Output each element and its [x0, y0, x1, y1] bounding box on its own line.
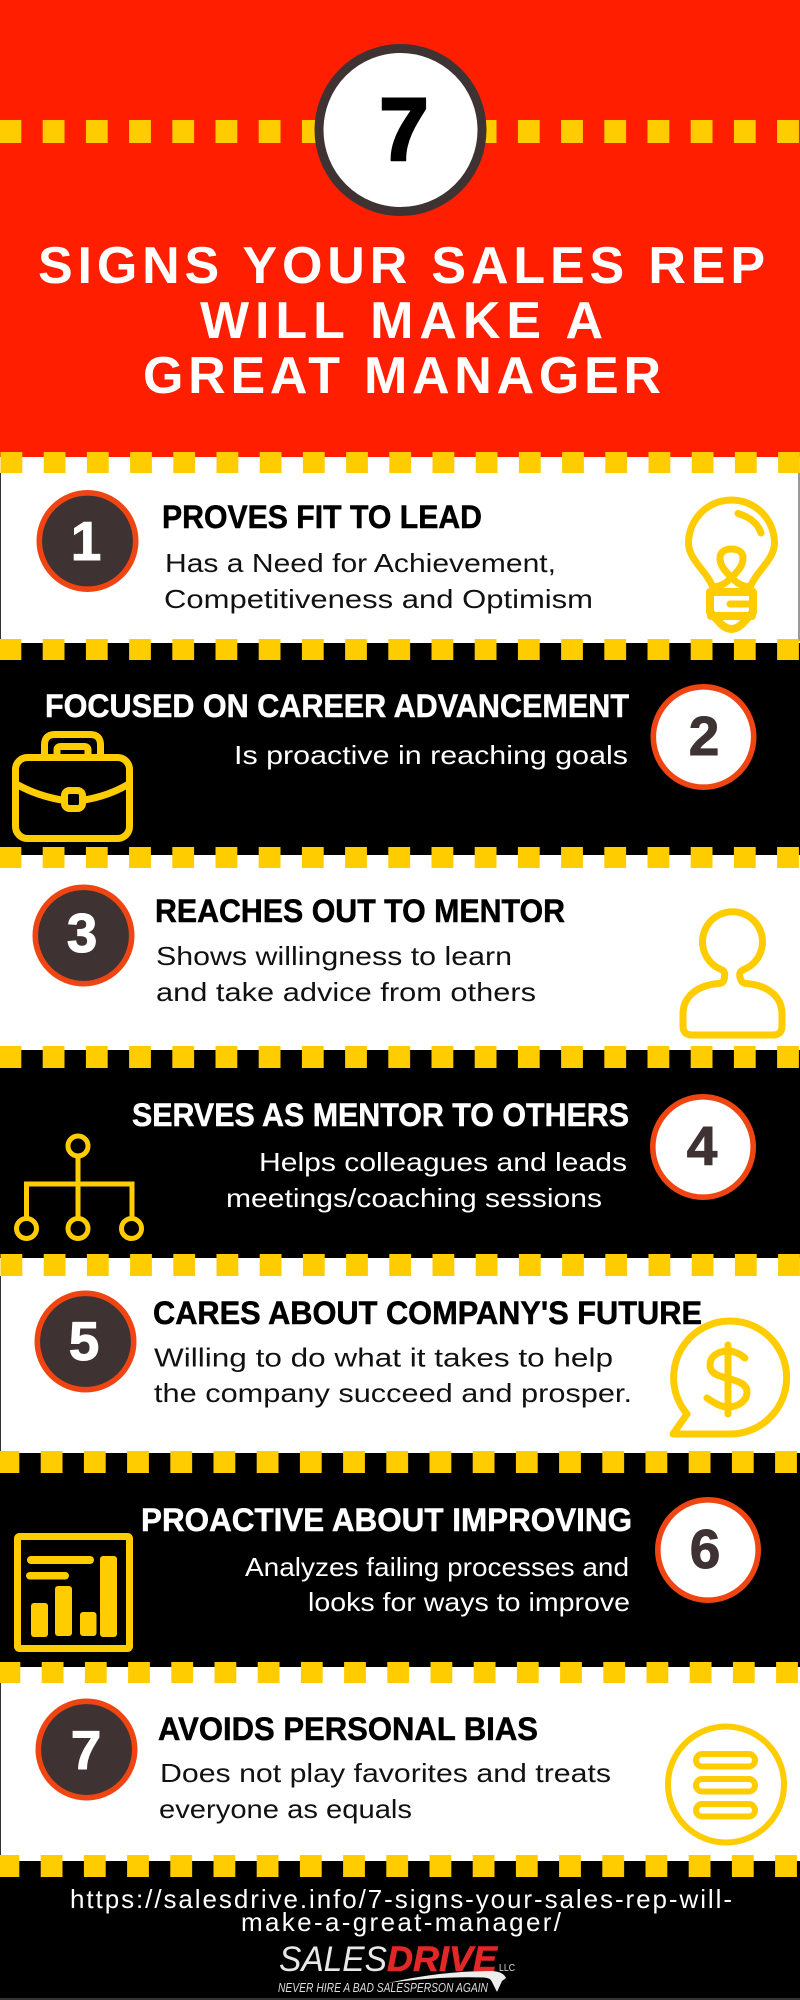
article url: [70, 1884, 732, 1937]
number badge 6: 6: [690, 1518, 720, 1580]
heading 2: FOCUSED ON CAREER ADVANCEMENT: [45, 688, 629, 724]
body text 7: everyone as equals: [159, 1794, 412, 1824]
body text 1: Competitiveness and Optimism: [164, 584, 593, 614]
number badge 4: [653, 1097, 753, 1197]
panel: sign 2: [0, 643, 800, 855]
icon: org chart: [16, 1136, 142, 1238]
title: [38, 237, 765, 405]
number badge 6: [658, 1500, 758, 1600]
body text 2: Is proactive in reaching goals: [234, 740, 628, 770]
number badge 1: [39, 493, 136, 589]
panel: sign 7: [0, 1667, 800, 1861]
body text 3: [156, 941, 536, 1007]
icon: bar chart report: [18, 1536, 130, 1648]
body text 1: Has a Need for Achievement,: [165, 548, 556, 578]
number badge 5: 5: [69, 1310, 99, 1372]
heading 7: AVOIDS PERSONAL BIAS: [158, 1711, 538, 1747]
title: WILL MAKE A: [200, 292, 603, 350]
body text 6: Analyzes failing processes and: [245, 1552, 629, 1582]
body text 4: Helps colleagues and leads: [259, 1147, 627, 1177]
panel: sign 1: [0, 457, 800, 643]
number badge 2: [653, 687, 754, 787]
number badge 3: 3: [67, 902, 97, 964]
body text 5: [154, 1342, 632, 1408]
body text 3: Shows willingness to learn: [156, 941, 512, 971]
article url: https://salesdrive.info/7-signs-your-sales-rep-will-: [70, 1884, 732, 1914]
number badge 7: [38, 1701, 135, 1798]
body text 6: looks for ways to improve: [308, 1587, 630, 1617]
body text 4: [226, 1147, 627, 1213]
number badge 3: [35, 887, 132, 984]
panel: sign 5: [0, 1258, 800, 1453]
heading 6: PROACTIVE ABOUT IMPROVING: [141, 1502, 632, 1538]
icon: list in circle: [668, 1726, 784, 1842]
number badge 7: 7: [71, 1719, 101, 1781]
body text 6: [245, 1552, 630, 1617]
heading 4: SERVES AS MENTOR TO OTHERS: [132, 1097, 629, 1133]
body text 3: and take advice from others: [156, 977, 536, 1007]
number badge 1: 1: [71, 510, 101, 572]
body text 4: meetings/coaching sessions: [226, 1183, 602, 1213]
body text 7: [159, 1758, 611, 1824]
icon: number seven badge: 7: [380, 80, 428, 179]
title: GREAT MANAGER: [143, 347, 661, 405]
number badge 4: 4: [687, 1114, 718, 1176]
panel: sign 4: [0, 1050, 800, 1258]
logo: SalesDrive: SALES: [279, 1940, 387, 1979]
icon: light bulb: [688, 500, 774, 629]
icon: briefcase: [16, 734, 130, 838]
icon: number seven badge: [319, 48, 482, 212]
number badge 2: 2: [689, 705, 719, 767]
article url: make-a-great-manager/: [241, 1907, 562, 1937]
body text 7: Does not play favorites and treats: [160, 1758, 611, 1788]
logo: SalesDrive: NEVER HIRE A BAD SALESPERSON AGAIN: [278, 1981, 489, 1995]
body text 5: the company succeed and prosper.: [154, 1378, 632, 1408]
logo: SalesDrive: DRIVE: [387, 1940, 499, 1979]
heading 5: CARES ABOUT COMPANY'S FUTURE: [153, 1295, 702, 1331]
heading 1: PROVES FIT TO LEAD: [162, 499, 482, 535]
panel: sign 6: [0, 1453, 800, 1667]
icon: dollar speech bubble: [673, 1321, 787, 1434]
icon: person: [683, 912, 782, 1035]
number badge 5: [37, 1293, 134, 1390]
title: SIGNS YOUR SALES REP: [38, 237, 765, 295]
logo: SalesDrive: LLC: [499, 1963, 515, 1974]
heading 3: REACHES OUT TO MENTOR: [155, 893, 565, 929]
footer panel: [0, 1861, 800, 2000]
body text 1: [164, 548, 593, 614]
panel: sign 3: [0, 855, 800, 1050]
body text 5: Willing to do what it takes to help: [154, 1342, 613, 1372]
logo: SalesDrive: [278, 1940, 515, 1995]
header panel: [0, 0, 800, 457]
